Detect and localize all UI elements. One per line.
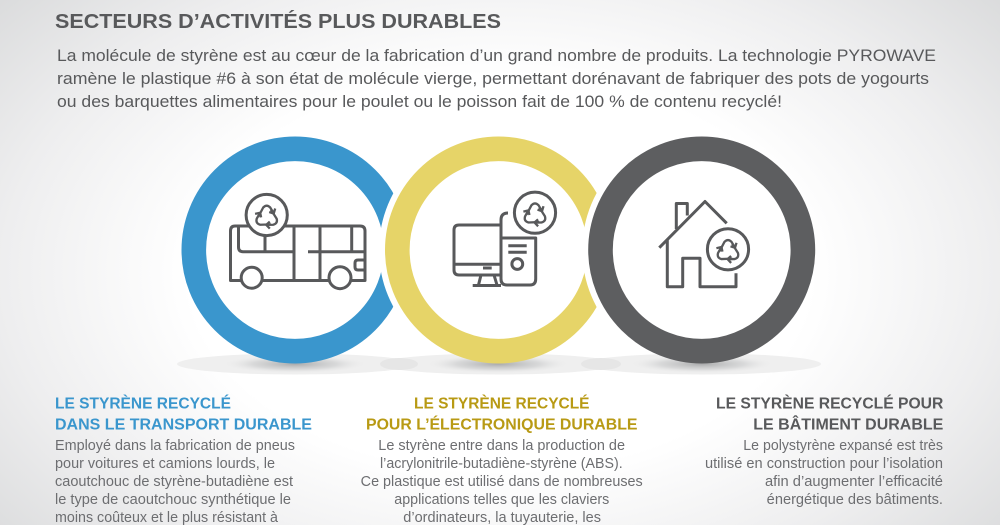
text block: transport: le type de caoutchouc synthétique le xyxy=(55,492,291,508)
text block: building: afin d’augmenter l’efficacité xyxy=(765,474,943,490)
text block: building: LE STYRÈNE RECYCLÉ POUR xyxy=(716,395,943,412)
text block: electronics: applications telles que les claviers xyxy=(394,492,609,508)
text block: building: Le polystyrène expansé est très xyxy=(743,438,943,454)
ground shadows xyxy=(177,354,821,374)
text block: electronics xyxy=(361,395,643,525)
text block: building: énergétique des bâtiments. xyxy=(767,492,943,508)
icon: recycled computer xyxy=(454,192,556,286)
text block: electronics: Ce plastique est utilisé dans de nombreuses xyxy=(361,474,643,490)
icon: recycled house xyxy=(659,202,749,287)
text block: transport: LE STYRÈNE RECYCLÉ xyxy=(55,395,231,412)
text block: building: LE BÂTIMENT DURABLE xyxy=(753,415,943,433)
text block: electronics: Le styrène entre dans la production de xyxy=(378,438,625,454)
icon: recycled bus xyxy=(230,194,365,289)
text block: transport: pour voitures et camions lourds, le xyxy=(55,456,275,472)
text block: transport: caoutchouc de styrène-butadiène est xyxy=(55,474,293,490)
text block: building xyxy=(705,395,943,508)
intro paragraph xyxy=(57,46,936,111)
text block: transport xyxy=(55,395,312,525)
intro paragraph: ramène le plastique #6 à son état de molécule vierge, permettant dorénavant de fabriquer des pots de yogourts xyxy=(57,69,929,88)
intro paragraph: ou des barquettes alimentaires pour le poulet ou le poisson fait de 100 % de contenu recyclé! xyxy=(57,92,782,111)
text block: electronics: LE STYRÈNE RECYCLÉ xyxy=(414,395,590,412)
text block: electronics: l’acrylonitrile-butadiène-styrène (ABS). xyxy=(380,456,623,472)
title: SECTEURS D’ACTIVITÉS PLUS DURABLES xyxy=(55,10,501,33)
intro paragraph: La molécule de styrène est au cœur de la fabrication d’un grand nombre de produits. La technologie PYROWAVE xyxy=(57,46,936,65)
ring: building xyxy=(600,149,803,351)
text block: transport: DANS LE TRANSPORT DURABLE xyxy=(55,416,312,433)
ring: transport xyxy=(194,149,396,351)
text block: building: utilisé en construction pour l’isolation xyxy=(705,456,943,472)
text block: transport: Employé dans la fabrication de pneus xyxy=(55,438,295,454)
ring: electronics xyxy=(397,149,600,351)
text block: electronics: POUR L’ÉLECTRONIQUE DURABLE xyxy=(366,416,638,433)
